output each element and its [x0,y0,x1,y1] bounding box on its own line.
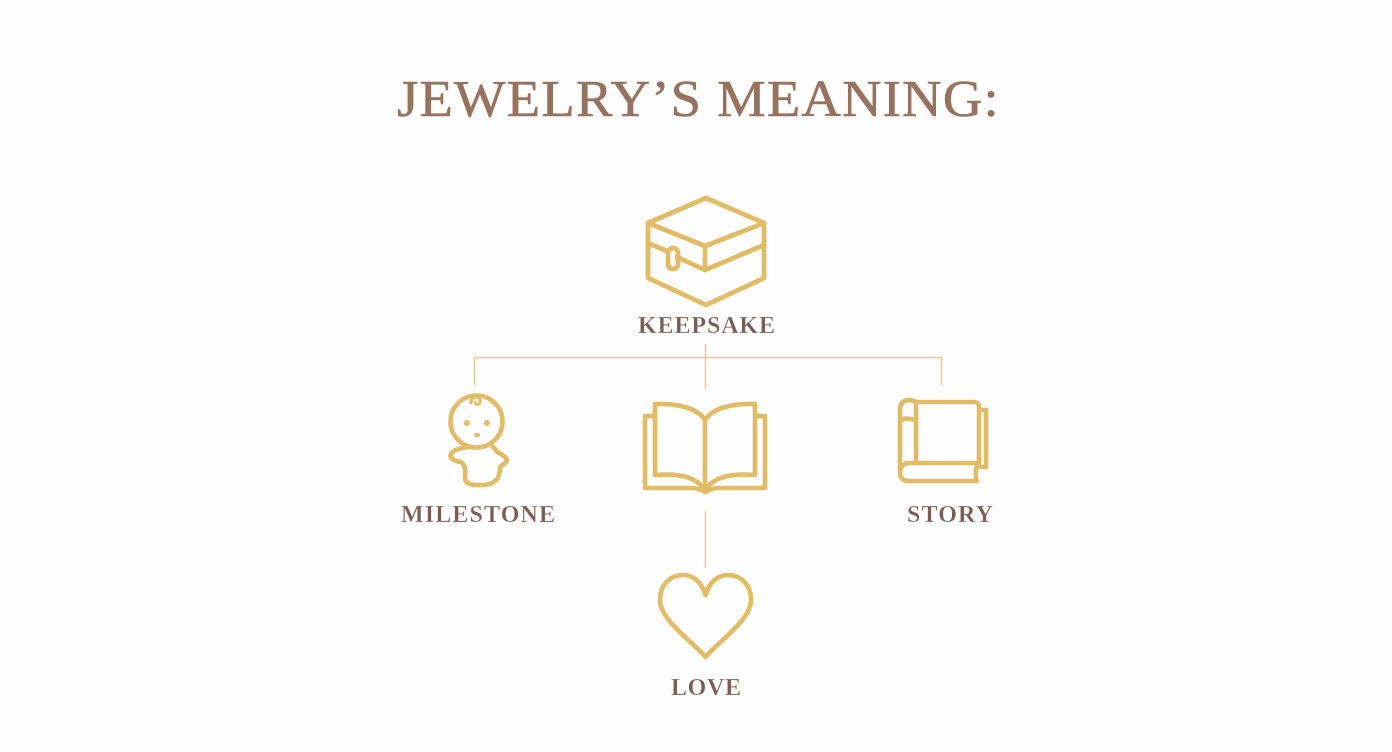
icon: open book [645,404,765,492]
icon: baby milestone [450,396,507,485]
icon: heart love [660,575,751,657]
title: JEWELRY’S MEANING: [397,69,999,128]
connector lines [474,344,942,567]
label: love: LOVE [671,675,741,701]
label: milestone: MILESTONE [401,502,555,528]
label: story: STORY [907,502,993,528]
icon: closed book story [900,400,986,481]
icon: keepsake box [648,198,764,305]
label: keepsake: KEEPSAKE [638,313,775,339]
